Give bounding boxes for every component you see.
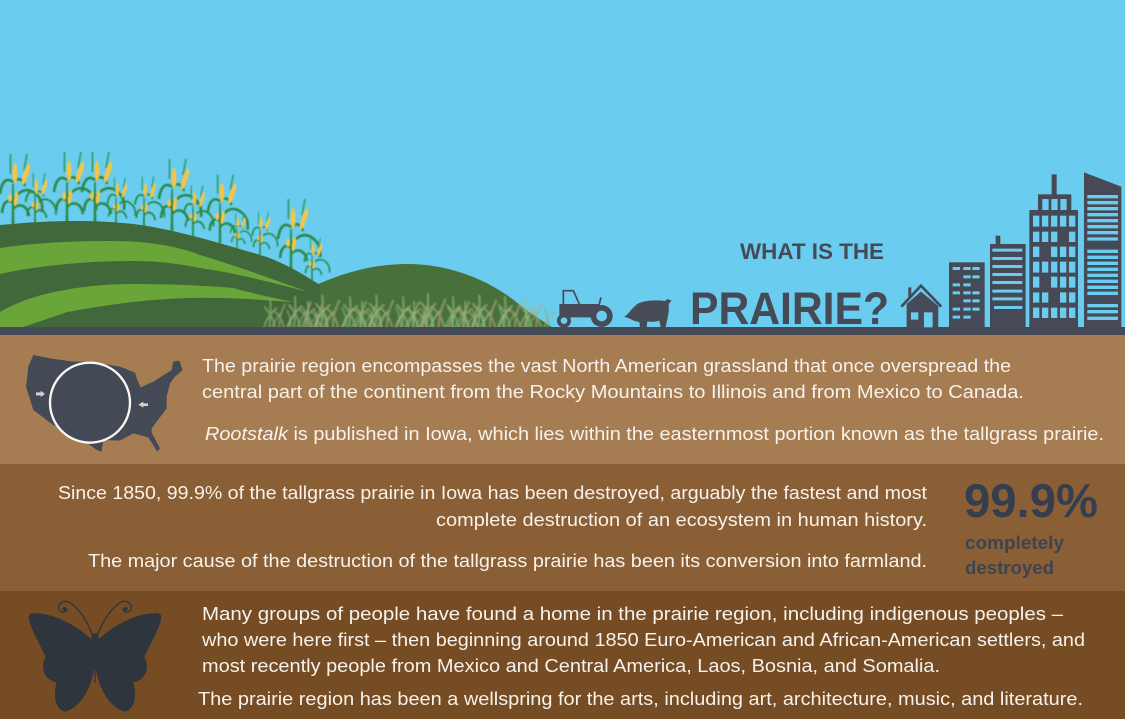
panel: people: who were here first – then beginning around 1850 Euro-American and African-American settlers, and [201, 630, 1085, 650]
large striped hill [0, 221, 320, 328]
text: peoples description: Many groups of people have found a home in the prairie region, including indigenous peoples – [202, 604, 1063, 624]
stat label: completely destroyed: destroyed [965, 558, 1054, 578]
icon: city skyline [949, 172, 1121, 328]
panel: people: most recently people from Mexico and Central America, Laos, Bosnia, and Somalia. [202, 656, 940, 676]
icon: tractor [557, 291, 613, 328]
stat label: completely destroyed: completely [965, 533, 1064, 553]
text: region description: The prairie region encompasses the vast North American grassland that once overspread the [202, 356, 1011, 376]
text: destruction description: Since 1850, 99.9% of the tallgrass prairie in Iowa has been destroyed, arguably the fastest and most [58, 483, 927, 503]
sky [0, 0, 1125, 335]
panel: destruction: complete destruction of an ecosystem in human history. [436, 510, 927, 530]
icon: butterfly [29, 601, 161, 712]
panel: region: central part of the continent from the Rocky Mountains to Illinois and from Mexico to Canada. [202, 382, 1024, 402]
icon: us map with circle [26, 355, 183, 452]
text: major cause: The major cause of the destruction of the tallgrass prairie has been its conversion into farmland. [88, 551, 927, 571]
building three [1029, 174, 1078, 328]
text: arts: The prairie region has been a wellspring for the arts, including art, architecture, music, and literature. [198, 689, 1083, 709]
icon: house [901, 286, 941, 327]
building four [1084, 172, 1121, 328]
text: rootstalk note: Rootstalk is published in Iowa, which lies within the easternmost portion known as the tallgrass prairie. [205, 424, 1104, 444]
ground line [0, 327, 1125, 335]
corn row [0, 152, 330, 281]
prairie grass [264, 294, 554, 327]
small hill [300, 264, 553, 328]
upper light stripe [0, 241, 308, 292]
stat: 99.9 percent: 99.9% [964, 474, 1098, 527]
panel: region [0, 335, 1125, 464]
heading: what is the: WHAT IS THE [740, 239, 884, 264]
icon: pig [624, 299, 672, 327]
stat label: completely destroyed [965, 533, 1064, 578]
heading: prairie: PRAIRIE? [690, 283, 889, 334]
lower light stripe [0, 284, 293, 328]
building one [949, 262, 985, 328]
panel: people [0, 591, 1125, 719]
building two [990, 236, 1026, 328]
panel: destruction [0, 464, 1125, 591]
